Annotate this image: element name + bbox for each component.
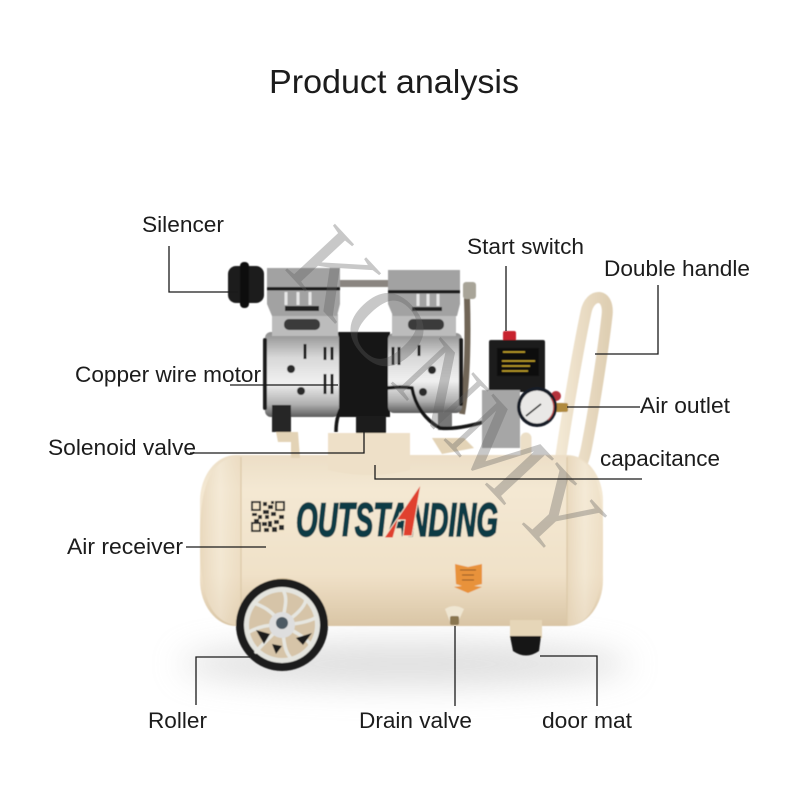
label: Air receiver: Air receiver <box>67 534 184 559</box>
door mat foot <box>510 620 542 656</box>
left cylinder <box>263 268 340 432</box>
roller wheel <box>236 578 328 671</box>
connecting rod <box>338 280 390 287</box>
label: Drain valve: Drain valve <box>359 708 472 733</box>
floor shadow <box>180 642 630 686</box>
label: Air outlet: Air outlet <box>640 393 731 418</box>
solenoid valve block <box>356 416 386 436</box>
pressure bracket <box>482 390 520 448</box>
label: Solenoid valve: Solenoid valve <box>48 435 196 460</box>
double handle <box>526 297 607 482</box>
start switch box <box>489 331 545 392</box>
air compressor product illustration <box>200 262 607 671</box>
orange warning label <box>454 564 482 593</box>
label: Copper wire motor: Copper wire motor <box>75 362 261 387</box>
label: Start switch: Start switch <box>467 234 584 259</box>
right cylinder <box>388 270 463 430</box>
pressure gauge <box>517 387 568 427</box>
mounting feet <box>276 432 474 458</box>
motor black body <box>338 332 390 417</box>
watermark: KONMY <box>266 205 626 580</box>
label: door mat: door mat <box>542 708 633 733</box>
leader lines <box>169 246 658 706</box>
label: capacitance: capacitance <box>600 446 720 471</box>
label: Double handle: Double handle <box>604 256 750 281</box>
drain valve <box>445 606 464 625</box>
copper hose <box>462 298 467 414</box>
air receiver tank <box>200 455 603 626</box>
tank logo <box>296 484 498 546</box>
capacitor cradle <box>328 433 410 475</box>
label: Silencer: Silencer <box>142 212 225 237</box>
tank logo: OUTSTANDING <box>296 493 498 546</box>
title: Product analysis <box>269 63 519 100</box>
label: Roller: Roller <box>148 708 207 733</box>
black wiring <box>336 387 495 432</box>
silencer <box>228 262 264 308</box>
QR code <box>251 501 284 532</box>
